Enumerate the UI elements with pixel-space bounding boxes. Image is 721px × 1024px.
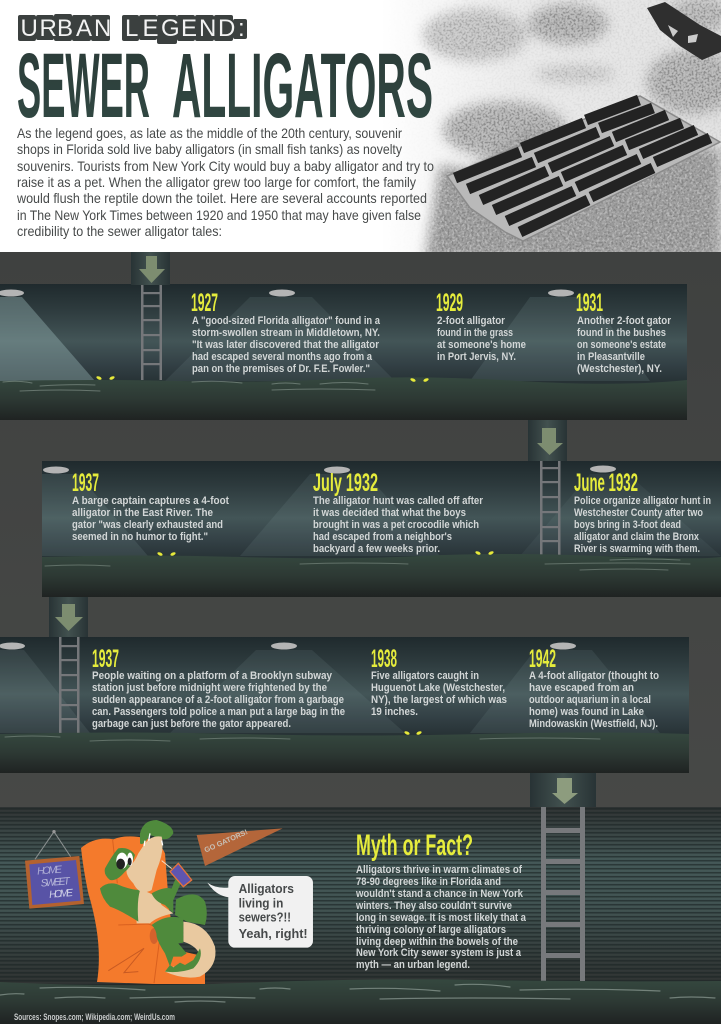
intro text: would flush the reptile down the toilet. Here are several accounts reported — [16, 191, 427, 206]
intro text: As the legend goes, as late as the middle of the 20th century, souvenir — [17, 126, 402, 141]
title block — [17, 14, 433, 137]
water — [0, 979, 721, 1024]
entry 1927: pan on the premises of Dr. F.E. Fowler." — [192, 363, 370, 375]
icon: home sweet home sign: HOME — [49, 888, 74, 901]
intro text: souvenirs. Tourists from New York City would buy a baby alligator and try to — [17, 159, 434, 174]
icon: ladder — [141, 284, 162, 380]
speech bubble: Alligators — [239, 882, 294, 896]
icon: home sweet home sign — [25, 830, 84, 909]
myth or fact: Alligators thrive in warm climates of — [356, 864, 522, 876]
panel: pipe 1 — [0, 284, 687, 420]
myth or fact: New York City sewer system is just a — [356, 947, 521, 959]
icon: shaft and arrow 4 — [530, 773, 596, 807]
icon: ladder — [59, 637, 80, 733]
myth or fact: long in sewage. It is most likely that a — [356, 912, 526, 924]
speech bubble: sewers?!! — [239, 911, 291, 925]
photo: street with sewer grate — [380, 0, 721, 252]
icon: pennant: GO GATORS! — [203, 827, 249, 854]
entry 1942 — [529, 645, 659, 730]
entry July 1932: it was decided that what the boys — [313, 507, 466, 519]
intro text: in The New York Times between 1920 and 1950 that may have given false — [17, 208, 421, 223]
upper jaw — [140, 820, 173, 844]
entry July 1932: The alligator hunt was called off after — [313, 495, 483, 507]
left arm — [100, 883, 140, 922]
myth or fact: 78-90 degrees like in Florida and — [356, 876, 501, 888]
intro text: credibility to the sewer alligator tales: — [17, 224, 222, 239]
entry 1931: found in the bushes — [577, 327, 666, 339]
panel: pipe 2 — [42, 461, 721, 597]
myth or fact: winters. They also couldn't survive — [355, 900, 512, 912]
myth or fact: wouldn't stand a chance in New York — [355, 888, 523, 900]
entry 1937 subway — [92, 645, 345, 730]
entry 1931: on someone's estate — [577, 339, 666, 351]
entry 1929: 1929 — [436, 289, 463, 317]
entry June 1932: Westchester County after two — [574, 507, 703, 519]
entry 1942: home) was found in Lake — [529, 706, 644, 718]
teeth — [144, 833, 163, 846]
entry 1937 subway: sudden appearance of a 2-foot alligator from a garbage — [92, 694, 344, 706]
intro text: shops in Florida sold live baby alligators (in small fish tanks) as novelty — [17, 142, 402, 157]
head — [105, 848, 135, 880]
icon: shaft and arrow 1 — [131, 252, 170, 285]
panel: bottom sewer wall — [0, 807, 721, 1024]
entry 1929 — [436, 289, 526, 363]
entry 1937 subway: 1937 — [92, 645, 119, 673]
entry 1937 barge: gator "was clearly exhausted and — [72, 519, 223, 531]
icon: glowing eyes — [157, 550, 494, 557]
entry July 1932: had escaped from a neighbor's — [313, 531, 452, 543]
entry 1938: 1938 — [371, 645, 397, 673]
entry June 1932: alligator and claim the Bronx — [574, 531, 699, 543]
entry June 1932 — [574, 469, 711, 555]
entry 1942: have escaped from an — [529, 682, 634, 694]
entry June 1932: River is swarming with them. — [574, 543, 700, 555]
icon: lamps and light cones — [0, 642, 660, 733]
eyes — [116, 853, 128, 869]
entry 1937 barge: 1937 — [72, 469, 99, 497]
icon: shaft and arrow 2 — [528, 420, 567, 461]
speech bubble — [207, 876, 313, 948]
intro text — [16, 126, 434, 239]
entry July 1932: July 1932 — [313, 469, 378, 497]
heading: sewer alligators: SEWER — [17, 35, 150, 137]
entry 1942: 1942 — [529, 645, 556, 673]
entry 1931 — [576, 289, 671, 375]
entry 1937 barge: A barge captain captures a 4-foot — [72, 495, 229, 507]
entry 1938: 19 inches. — [371, 706, 418, 718]
entry 1929: at someone's home — [437, 339, 526, 351]
myth or fact — [355, 829, 526, 971]
myth or fact: Myth or Fact? — [356, 829, 473, 862]
entry 1929: found in the grass — [437, 327, 513, 339]
right arm — [152, 870, 188, 913]
entry 1938: Five alligators caught in — [371, 670, 479, 682]
entry July 1932: backyard a few weeks prior. — [313, 543, 440, 555]
icon: home sweet home sign: HOME — [37, 865, 63, 878]
heading: urban legend: URBAN LEGEND: — [20, 15, 245, 42]
entry 1937 subway: garbage can just before the gator appeared. — [92, 718, 291, 730]
entry 1942: A 4-foot alligator (thought to — [529, 670, 659, 682]
entry 1929: 2-foot alligator — [437, 315, 505, 327]
entry 1927: 1927 — [191, 289, 218, 317]
icon: lamps and light cones — [42, 466, 721, 556]
entry 1942: outdoor aquarium in a local — [529, 694, 651, 706]
entry 1937 barge — [72, 469, 229, 543]
background: dark concrete — [0, 252, 721, 1024]
icon: sewer grate — [447, 96, 720, 241]
intro text: raise it as a pet. When the alligator grew too large for comfort, the family — [17, 175, 416, 190]
icon: large ladder — [541, 807, 585, 981]
belly — [136, 890, 173, 923]
entry 1927: "It was later discovered that the alligator — [192, 339, 379, 351]
entry 1931: 1931 — [576, 289, 603, 317]
entry 1938: Huguenot Lake (Westchester, — [371, 682, 505, 694]
entry July 1932 — [313, 469, 483, 555]
icon: ladder — [540, 461, 560, 556]
entry 1927: had escaped several months ago from a — [192, 351, 372, 363]
can — [170, 863, 192, 887]
entry June 1932: boys bring in 3-foot dead — [574, 519, 681, 531]
thigh and foot — [152, 917, 187, 967]
entry 1931: Another 2-foot gator — [577, 315, 671, 327]
entry 1931: (Westchester), NY. — [577, 363, 662, 375]
myth or fact: living deep within the bowels of the — [356, 936, 518, 948]
entry 1937 barge: seemed in no humor to fight." — [72, 531, 208, 543]
water — [42, 554, 721, 597]
entry 1931: in Pleasantville — [577, 351, 645, 363]
entry 1929: in Port Jervis, NY. — [437, 351, 516, 363]
icon: home sweet home sign: SWEET — [40, 876, 71, 890]
water — [0, 732, 689, 773]
entry 1937 subway: can. Passengers told police a man put a large bag in the — [92, 706, 345, 718]
entry July 1932: brought in was a pet crocodile which — [313, 519, 479, 531]
sources: Sources: Snopes.com; Wikipedia.com; WeirdUs.com — [14, 1012, 175, 1022]
entry 1927: A "good-sized Florida alligator" found in a — [192, 315, 380, 327]
myth or fact: thriving colony of large alligators — [356, 924, 506, 936]
speech bubble: Yeah, right! — [239, 927, 308, 941]
entry 1942: Mindowaskin (Westfield, NJ). — [529, 718, 658, 730]
icon: lamps and light cones — [0, 290, 650, 381]
lower jaw — [126, 836, 163, 892]
entry 1937 subway: station just before midnight were frightened by the — [92, 682, 327, 694]
illustration: alligator in armchair — [81, 820, 216, 984]
entry 1927 — [191, 289, 380, 375]
entry 1938 — [371, 645, 507, 718]
entry 1938: NY), the largest of which was — [371, 694, 507, 706]
rear knee — [175, 894, 207, 925]
entry 1937 subway: People waiting on a platform of a Brooklyn subway — [92, 670, 332, 682]
icon: shaft and arrow 3 — [49, 597, 88, 637]
panel: pipe 3 — [0, 637, 689, 773]
water — [0, 377, 687, 420]
armchair — [81, 836, 205, 984]
entry 1937 barge: alligator in the East River. The — [72, 507, 213, 519]
icon: glowing eyes — [96, 375, 429, 383]
tail — [165, 922, 216, 978]
entry 1927: storm-swollen stream in Middletown, NY. — [192, 327, 380, 339]
icon: pennant — [197, 827, 283, 866]
myth or fact: myth — an urban legend. — [356, 959, 470, 971]
entry June 1932: June 1932 — [574, 469, 638, 497]
icon: glowing eyes — [404, 730, 422, 736]
speech bubble: living in — [239, 896, 283, 910]
